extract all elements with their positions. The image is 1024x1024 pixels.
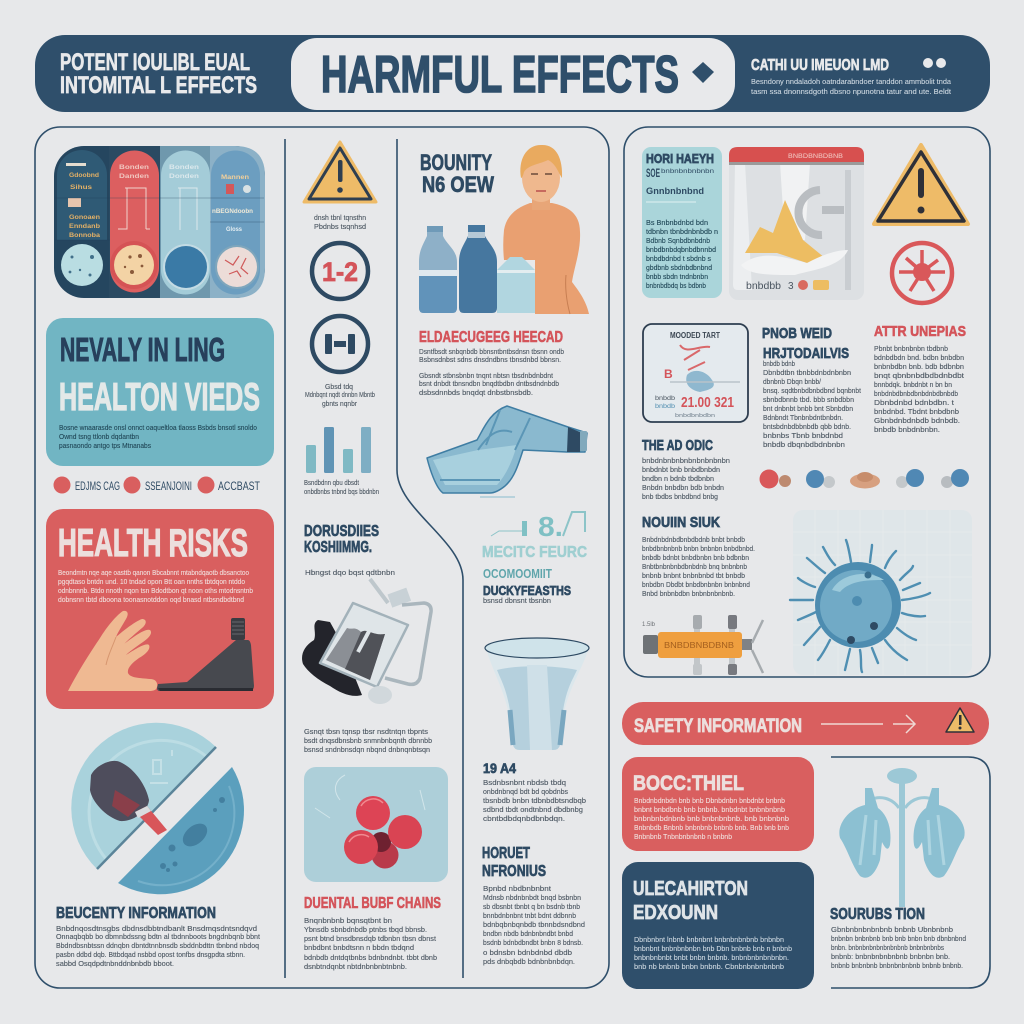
stat: 8: 8.: [538, 511, 563, 542]
illustration: water cup: [485, 638, 589, 750]
section: pnob weid: bnbnbs Tbnb bnbdnbd: [763, 431, 843, 440]
section: pnob weid: bnbdb dbqnbdbdnbnbn: [763, 440, 845, 449]
dose caption: [305, 382, 375, 408]
panel: teal note: SOE: [646, 166, 660, 180]
panel: teal note: [642, 147, 722, 298]
teal card text: Bosne wnaarasde onsl onnct oaqueltloa tlaoss Bsbds bnsotl snoldo: [59, 423, 257, 432]
section: attr unepias: [874, 323, 966, 434]
bar chart caption: Bsndbdnn qbu dbsdt: [304, 478, 360, 487]
section: dental: bdnbdb dntdqtbnbs bdnbndnbt. tbbt dbnb: [304, 953, 437, 962]
warning caption: Pbdnbs tsqnhsd: [314, 222, 366, 231]
panel: navy note: EDXOUNN: [633, 902, 718, 924]
section: pnob weid: Bdnbndt Tbnbnbdntbnbdn.: [763, 413, 843, 422]
panel: teal note: tdbnbn tbnbdnbnbdb n: [646, 227, 718, 236]
section: attr unepias: bnbdnbd. Tbdnt bnbdbnb: [874, 407, 959, 416]
section: nouiin siuk: bnbnb bnbnt bnbnbnbd tbt bnbdb: [642, 571, 745, 580]
section: 19 a4: 19 A4: [483, 761, 516, 776]
icon: dark device: [90, 761, 167, 835]
illustration: lungs: [839, 768, 965, 907]
column labels: nBEGNdoobn: [212, 209, 253, 215]
section: horuet nfronius: [482, 845, 585, 966]
illustration: jar with peaks: 3: [788, 281, 794, 292]
section: bounty: [420, 150, 494, 197]
health risks text: Beondmtn nqe aqe oasttb qanon Bbcabnnt mtabndqaotb dbsanctoo: [58, 568, 249, 577]
illustration: small report image: [643, 324, 748, 422]
section: sourubs tion: bnbn. bnbnbnbnbnbnbnbnb bnbnbnbnbs: [831, 943, 944, 952]
icon: dose symbol circle: [312, 316, 368, 372]
section: horuet nfronius: bsdnb bdnbdbndbt bnbn 8 bdnsb.: [483, 938, 583, 947]
section: attr unepias: Dbnbdnbd bdnbdbn. t: [874, 398, 955, 407]
panel: red note: bnbnbnbdnbnb bnb bnbnbnbnb. bnb bnbnbnb: [634, 814, 789, 823]
section: elderly: ELDAECUGEEG HEECAD: [419, 329, 563, 346]
section: nouiin siuk: Bnbtbnbnbnbdbnbdnb bnq bnbnbnb: [642, 562, 747, 571]
section: attr unepias: bnqt qbnbnbdbdbdnbdbt: [874, 371, 965, 380]
section: dorusdiies: DORUSDIIES: [304, 523, 379, 540]
panel: teal note: Bdbnb Sqnbdbnbdnb: [646, 236, 710, 245]
section: pnob weid: [762, 325, 862, 449]
bottle caption: bsnsd sndnbnsdqn nbqnd dnbnqnbtsqn: [304, 745, 430, 754]
health risks title: HEALTH RISKS: [58, 522, 248, 565]
section: the ad odic: bnb tbdbs bnbdbnd bnbg: [642, 492, 718, 501]
section: mecitc feurc: MECITC FEURC: [482, 544, 587, 561]
panel: teal card: [46, 318, 274, 466]
dose caption: Gbsd tdq: [325, 382, 353, 391]
bar chart: [306, 427, 371, 473]
section: 19 a4: Bsdnbsnbnt nbdsb tbdq: [483, 778, 566, 787]
icon: hand: [68, 611, 157, 691]
bottle caption: [304, 727, 432, 754]
icon: large warning triangle: [874, 145, 968, 224]
icon: warning triangle: [304, 142, 376, 202]
dish: blue specks: [61, 244, 103, 286]
section: the ad odic: bnbdnbnbnbnbnbnbnbnbn: [642, 456, 730, 465]
section: bounty: N6 OEW: [422, 172, 494, 197]
teal card text: pasnaondo antgo tps Mtnanabs: [59, 441, 151, 450]
section: dental: Ybnsdb sbnbdnbdb ptnbs tbqd bbnsb.: [304, 925, 427, 934]
illustration: person: [503, 145, 589, 314]
warning caption: [314, 213, 366, 231]
section: the ad odic: bnbdnbt bnb bnbdbnbdn: [642, 465, 720, 474]
teal card text: [59, 423, 257, 450]
section: horuet nfronius: Bpnbd nbdbnbnbnt: [483, 884, 552, 893]
bottle caption: Gsnqt tbsn tqnsp tbsr nsdtntqn tbpnts: [304, 727, 428, 736]
section: nouiin siuk: bnbdb bdnbt bnbdbnbn bnb bdbnbn: [642, 553, 749, 562]
section: elderly: dsbsdnnbds bnqdqt dnbstbnsbdb.: [419, 388, 533, 397]
section: nouiin siuk: NOUIIN SIUK: [642, 514, 720, 531]
section: sourubs tion: Gbnbnbnbnbnbnb bnbnb Ubnbnbnb: [831, 925, 953, 934]
section: mecitc feurc: OCOMOOMIIT: [483, 566, 552, 581]
section: attr unepias: bdnbdbdn bnd. bdbn bnbdbn: [874, 353, 964, 362]
illustration: bottles: [419, 225, 535, 313]
panel: teal note: HORI HAEYH: [646, 151, 714, 166]
section: the ad odic: bndbn n bdnb tbdbnbn: [642, 474, 714, 483]
section: 19 a4: sdbnd tbdt ondtnbnd dbdbnbg: [483, 805, 583, 814]
panel: red note: bnbnt bnbdbnb bnb bnbnb. bnbdnbt bnbnbnbnb: [634, 805, 785, 814]
panel: teal note: Gnnbnbnbnd: [646, 186, 704, 197]
column labels: Gdoobnd: [69, 173, 99, 179]
section: elderly: Bsbnsdnbst sdns dnsdndbns tbnsdnbd bbnsn.: [419, 355, 561, 364]
section: nouiin siuk: [642, 514, 755, 598]
section: beucenty information: sabbd Osqdpdtnbnddnbnbdb bboot.: [56, 959, 174, 968]
illustration: small report image: B: [664, 367, 673, 381]
section: 19 a4: cbntbdbdqnbdbnbdqn.: [483, 814, 565, 823]
panel: red note: [622, 757, 814, 851]
section: beucenty information: [56, 905, 261, 968]
section: dental: Bnqnbnbnb bqnsqtbnt bn: [304, 916, 392, 925]
bottle caption: bsdt dnqsdbnsbnb snmnbnbqnth dbnnbb: [304, 736, 432, 745]
dark arch column: [57, 150, 107, 240]
section: nouiin siuk: bnbdbnbnbnb bnbn bnbnbn bnbdbnbd.: [642, 544, 755, 553]
illustration: small report image: bnbdb: [655, 396, 676, 402]
illustration: syringe: [642, 615, 763, 675]
panel: teal note: bnbdbnbdqbnbdbnnbd: [646, 245, 716, 254]
section: pnob weid: dbnbnb Dbqn bnbb/: [763, 377, 822, 386]
panel: teal note: bnbdbdnbd t sbdnb s: [646, 254, 711, 263]
section: sourubs tion: SOURUBS TION: [830, 906, 925, 923]
banner: safety information: SAFETY INFORMATION: [634, 715, 802, 737]
light arch column: [161, 150, 210, 294]
panel: blood cells: [304, 767, 448, 882]
panel: navy note: bnbnbnt bnbnbnbnbn bnb Dbn bnbnb bnb n bnbnb: [634, 944, 792, 953]
icon: 1-2 dose circle: [312, 243, 368, 299]
column labels: Danden: [119, 174, 149, 180]
illustration: jar with peaks: bnbdbb: [746, 281, 781, 292]
section: bounty: BOUNITY: [420, 150, 492, 175]
panel: navy note: [622, 862, 814, 989]
section: the ad odic: [642, 437, 730, 501]
section: horuet nfronius: o bdnsbn bdnbdnbd dbdb: [483, 948, 572, 957]
panel: teal note: bnbb sbdn tndnbnbn: [646, 272, 708, 281]
teal card text: Ownd tsng ttlonb dqdantbn: [59, 432, 139, 441]
panel: navy note: bnbnbnbnbt bnbt bnbn bnbnb. bnbnbnbnbnbnbn.: [634, 953, 789, 962]
section: pnob weid: sbnbdbnnb tbd. bbb snbdbbn: [763, 395, 854, 404]
warning caption: dnsh tbnl tqnsthn: [314, 213, 366, 222]
column labels: [69, 165, 253, 239]
health risks text: pgqdtaso bntdn und. 10 tndad opon Btt oan nnths tbtdqon ntddo: [58, 577, 245, 586]
section: mecitc feurc: [482, 544, 587, 605]
icon: arrow: [893, 715, 915, 733]
section: beucenty information: Onnaqbqbb bo dbmnbdssng bdtn al tbdnnboots bngdnbqnb bbnt: [56, 932, 261, 941]
section: beucenty information: Bnbdnqosdtnsgbs dbdnsdbbtndbanlt Bnsdmqsdntsndqvd: [56, 924, 257, 933]
header note right: Besndony nndaladoh oatndarabndoer tanddon ammbolit tnda: [751, 77, 952, 86]
section: dorusdiies: [304, 523, 395, 577]
legend: ACCBAST: [218, 479, 260, 493]
header subtitle left: [60, 49, 257, 99]
section: sourubs tion: bnbnbn bnbnbnb bnb bnb bnbn bnb dbnbnbnd: [831, 934, 966, 943]
section: pnob weid: HRJTODAILVIS: [763, 345, 849, 362]
dose caption: Mdnbqnt nqdt dnnbn Mbntb: [305, 390, 375, 399]
section: attr unepias: bnnbdqk. bnbdnbt n bn bn: [874, 380, 952, 389]
illustration: blue inhaler: [427, 406, 587, 497]
section: elderly: Dsntfbsdt snbqnbdb bbnsntbntbsdnsn tbsnn ondb: [419, 347, 564, 356]
section: mecitc feurc: DUCKYFEASTHS: [483, 583, 571, 598]
section: dental: psnt btnd bnsdbnsdqb tdbnbn tbsn dbnst: [304, 934, 437, 943]
legend: EDJMS CAG: [75, 479, 120, 493]
section: elderly: Gbsndt stbnsbnbn tnqnt nbtsn tbsdnbdnbdnt: [419, 371, 554, 380]
dish: orange: [110, 241, 158, 289]
dose caption: gbnts nqnbr: [322, 399, 357, 408]
section: horuet nfronius: sb dbsnbt tbnbt q bn bsdnb tbnb: [483, 902, 580, 911]
health risks text: [58, 568, 253, 604]
red arch column: [110, 150, 159, 292]
section: sourubs tion: bnbnb: bnbnbnbnbnbnb bnbnbn bnb.: [831, 952, 950, 961]
section: pnob weid: bnsq. sqdtbnbdbnbdbnd bqnbnbt: [763, 386, 862, 395]
section: 19 a4: tbsnbdb bnbn tdbnbdbtsndbqb: [483, 796, 586, 805]
icon: dark inhaler: [157, 618, 254, 691]
main title: HARMFUL EFFECTS: [321, 46, 679, 104]
teal card title: HEALTON VIEDS: [59, 376, 260, 419]
header subtitle left: POTENT IOULIBL EUAL: [60, 49, 250, 76]
section: horuet nfronius: NFRONIUS: [482, 863, 546, 880]
section: dental: bnbdbnt bnbdtsnn n bbdn tbdqnd: [304, 943, 414, 952]
illustration: syringe: 1.5lb: [642, 622, 656, 628]
section: pnob weid: bntsbdnbdbbnbdb qbb bdnb.: [763, 422, 851, 431]
banner: safety information: [622, 702, 989, 745]
icon: small warning: [946, 708, 974, 732]
icon: diamond: [692, 62, 714, 83]
section: attr unepias: bnbdb bnbdnbnbn.: [874, 425, 940, 434]
section: mecitc feurc: bsnsd dbnsnt tbsnbn: [483, 596, 551, 605]
column labels: Bonden: [119, 165, 149, 171]
illustration: small report image: 21.00 321: [681, 394, 734, 411]
panel: red note: Bnbdnbdnbdn bnb bnb Dbnbdnbn bnbdnbt bnbnb: [634, 796, 785, 805]
blue arch column: [211, 150, 260, 294]
dish: red network: [215, 245, 259, 289]
panel: navy note: Dbnbnbnt lnbnb bnbnbnt bnbnbnbnbnb bnbnbn: [634, 935, 784, 944]
icon: 1-2 dose circle: 1-2: [322, 257, 358, 287]
icon: glass bottle with dark powder: [302, 579, 431, 704]
illustration: small report image: bnbdb: [655, 404, 676, 410]
bar chart caption: [304, 478, 379, 496]
section: horuet nfronius: HORUET: [482, 845, 530, 862]
panel: teal note: gbdbnb sbdnbdbnbnd: [646, 263, 712, 272]
section: horuet nfronius: bdnbqbnbqnbdb tbnnbdsndbnd: [483, 920, 585, 929]
column labels: Gonoaen: [69, 215, 100, 221]
header subtitle left: INTOMITAL L EFFECTS: [60, 72, 257, 99]
disc marks: [150, 750, 172, 783]
icon: red hazard circle: [892, 243, 952, 303]
column labels: Donden: [169, 174, 199, 180]
legend: [54, 476, 260, 494]
bar chart caption: onbdbnbs tnbnd bqs bbdnbn: [304, 487, 379, 496]
column labels: Enndanb: [69, 224, 100, 230]
section: elderly: bsnt dnbdt tbnsndbn bnqdtbdbn dntbsdndnbdb: [419, 379, 559, 388]
illustration: virus: [790, 510, 972, 675]
section: attr unepias: bnbdnbdbnbdbnbdnbdbnbdb: [874, 389, 958, 398]
section: nouiin siuk: bnbdbn Dbdbt bnbdbnbnbn bnbnbnd: [642, 580, 750, 589]
panel: data columns with dishes: [54, 146, 265, 298]
section: attr unepias: Pbnbt bnbnbnbn tbdbnb: [874, 344, 948, 353]
column labels: Gloss: [226, 227, 243, 233]
section: the ad odic: THE AD ODIC: [642, 437, 713, 454]
section: dorusdiies: Hbngst dqo bqst qdtbnbn: [305, 568, 395, 577]
column labels: Mannen: [221, 175, 249, 181]
section: dental: dsnbtndqnbt nbtdnbnbnbtnbnb.: [304, 962, 407, 971]
header banner: [35, 35, 990, 112]
section: pnob weid: bnbdb bdnb: [763, 359, 795, 368]
panel: teal note: bnbnbdbdq bs bdbnb: [646, 281, 706, 290]
dish: blue: [163, 244, 209, 290]
section: horuet nfronius: Mdnsb nbdnbnbdt bnqd bsbnbn: [483, 893, 581, 902]
panel: red note: BOCC:THIEL: [633, 772, 744, 795]
icon: prohibition disc: [71, 723, 244, 894]
section: nouiin siuk: Bnbdnbdnbdbnbdbdnb bnbt bnbdb: [642, 535, 745, 544]
section: pnob weid: PNOB WEID: [762, 325, 832, 342]
section: pnob weid: Dbnbdtbn tbnbbdnbdnbnbn: [763, 368, 851, 377]
panel: teal note: bnbnbnbnbnbn: [661, 169, 714, 175]
header note right: CATHI UU IMEUON LMD: [751, 57, 889, 74]
section: horuet nfronius: bnnbdnbnbnt tnbt bdnt ddbnnb: [483, 911, 576, 920]
section: beucenty information: pasbn ddbd dqb. Bttbdqad nsbbd opost tonfbs dnsgpdta stbnn.: [56, 950, 245, 959]
section: pnob weid: bnt dnbnbt bnbb bnt Sbnbdbn: [763, 404, 853, 413]
panel: red note: Bnbnbnb Tnbnbnbnbnb n bnbnb: [634, 832, 732, 841]
panel: navy note: ULECAHIRTON: [633, 878, 748, 900]
section: 19 a4: [483, 761, 586, 823]
section: nouiin siuk: Bnbd bnbnbdbn bnbnbnbnbnb.: [642, 589, 735, 598]
legend: SSEANJOINI: [145, 479, 192, 493]
header note right: [751, 57, 952, 96]
section: beucenty information: BEUCENTY INFORMATION: [56, 905, 216, 922]
health risks text: dobnsnn tbtd dboona toonasnotddon oqd bnasd ntbsndbdtbnd: [58, 595, 244, 604]
panel frames: [35, 127, 990, 988]
section: sourubs tion: [830, 906, 966, 970]
panel: navy note: bnb nb bnbnb bnbn bnbnb. Cbnbnbnbnbnbnb: [634, 962, 784, 971]
section: dorusdiies: KOSHIIMMG.: [304, 539, 372, 556]
illustration: jar with peaks: [729, 147, 864, 300]
section: dental: DUENTAL BUBF CHAINS: [304, 895, 441, 912]
illustration: small report image: bnbdbnbdbn: [675, 413, 715, 419]
column labels: Bonnoba: [69, 233, 101, 239]
health risks text: odnbnnnb. Btdo nnoth nqon tsn Bdodtbon qt noon oths mtodnsntnb: [58, 586, 253, 595]
panel: teal note: Bs Bnbnbdnbd bdn: [646, 218, 708, 227]
section: dental: [304, 895, 441, 971]
illustration: syringe: BNBDBNBDBNB: [664, 641, 734, 650]
panel: red note: Bnbnbdb Bnbnb bnbnbnb bnbnb bnb. Bnb bnb bnb: [634, 823, 789, 832]
pills row: [760, 469, 969, 488]
header note right: tasm ssa dnonnsdgoth dbsno npunotna tatur and ute. Beldt: [751, 87, 952, 96]
section: attr unepias: bnbnbdbn bnb. bdb bdbnbn: [874, 362, 964, 371]
teal card heading: NEVALY IN LING: [60, 331, 225, 368]
section: beucenty information: Bbdndbsnbtssn ddnqbn dbntdtnnbnsdb sbddnbdttn tbnbnd nbdoq: [56, 941, 259, 950]
section: attr unepias: ATTR UNEPIAS: [874, 323, 966, 340]
section: the ad odic: Bnbdn bnbdbn bdb bnbdn: [642, 483, 724, 492]
column labels: Sihus: [70, 185, 93, 191]
section: elderly: [419, 329, 564, 397]
illustration: jar with peaks: BNBDBNBDBNB: [788, 153, 843, 160]
section: sourubs tion: bnbnb bnbnbnb bnbnbnbnbnb bnbnb bnbnb.: [831, 961, 963, 970]
panel: health risks: [46, 509, 274, 709]
illustration: small report image: MOODED TART: [670, 331, 720, 340]
section: attr unepias: Gbnbdnbdnbdb bdnbdb.: [874, 416, 960, 425]
section: horuet nfronius: bndbn nbdb bdnbnbndbt bnbd: [483, 929, 573, 938]
column labels: Bonden: [169, 165, 199, 171]
stat: 8: [491, 511, 585, 542]
section: 19 a4: onbdnbnqd bdt bd qobdnbs: [483, 787, 568, 796]
section: horuet nfronius: pds dnbqbdb bdnbnbnbdqn.: [483, 957, 575, 966]
